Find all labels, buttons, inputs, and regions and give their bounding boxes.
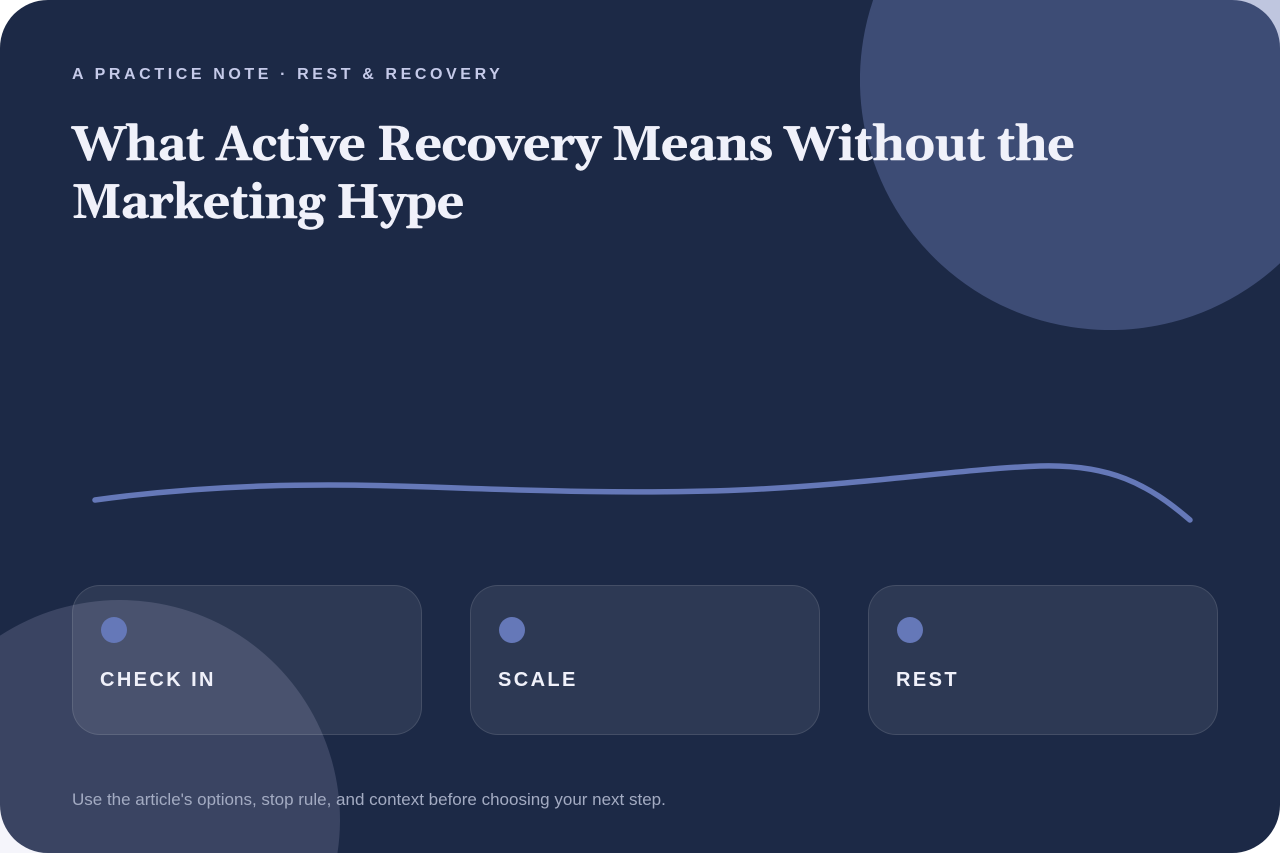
- card: check in: [72, 585, 422, 735]
- footer note: Use the article's options, stop rule, and context before choosing your next step.: [72, 790, 666, 809]
- card: rest: [868, 585, 1218, 735]
- decorative circle: top right: [860, 0, 1280, 330]
- label: SCALE: [498, 669, 578, 691]
- title: What Active Recovery Means Without the Marketing Hype: [72, 116, 1074, 235]
- label: CHECK IN: [100, 669, 216, 691]
- icon: dot: [897, 617, 923, 643]
- card: scale: [470, 585, 820, 735]
- eyebrow: A PRACTICE NOTE · REST & RECOVERY: [72, 66, 503, 83]
- decorative circle: bottom left: [0, 600, 340, 853]
- icon: dot: [101, 617, 127, 643]
- icon: dot: [499, 617, 525, 643]
- label: REST: [896, 669, 959, 691]
